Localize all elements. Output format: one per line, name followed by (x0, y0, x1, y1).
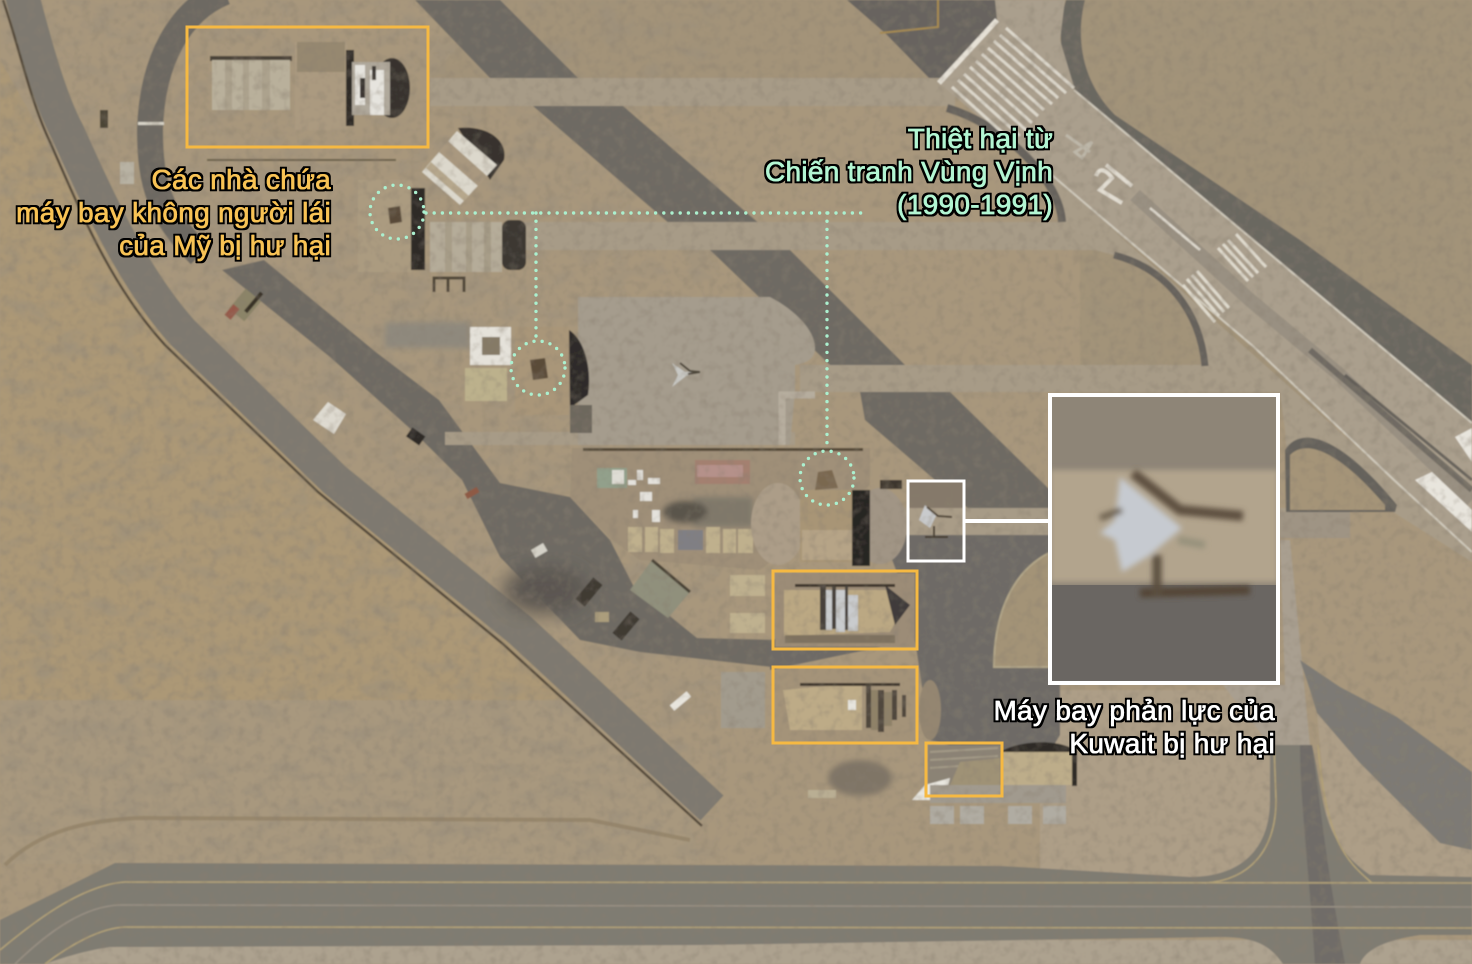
hangar 2 (502, 220, 526, 270)
label: Kuwaiti jet damaged: Máy bay phản lực của (993, 695, 1275, 726)
desert track (5, 818, 690, 865)
top-centre apron (847, 0, 997, 83)
runway markings (939, 20, 1472, 552)
callout box: drone hangars top (187, 27, 428, 147)
label: Kuwaiti jet damaged: Kuwait bị hư hại (1069, 728, 1275, 759)
oil staining (503, 566, 587, 614)
centre building (295, 42, 347, 130)
runway concrete (939, 0, 1472, 550)
building group: upper hangars (207, 42, 700, 433)
shoulder curves (947, 108, 1205, 366)
damaged building 2 (515, 327, 569, 415)
dotted leader lines: Gulf War damage (370, 185, 862, 505)
barrier (434, 278, 464, 292)
perimeter road (3, 0, 712, 826)
parked jet (672, 363, 700, 387)
leader: to damage 3 (825, 213, 829, 450)
concrete apron (578, 297, 815, 445)
base compound (570, 448, 907, 618)
touchdown stripes (1183, 234, 1266, 322)
compound ground (570, 448, 870, 570)
right damaged hangar (374, 58, 410, 118)
jet on apron (910, 482, 962, 538)
ground stain (385, 322, 470, 348)
white frame building (470, 327, 511, 365)
leader: to damage 2 (534, 213, 538, 340)
label: US drone hangars damaged: máy bay không người lái (16, 197, 331, 228)
label: Gulf War damage: Thiệt hại từ (908, 123, 1053, 154)
label: Kuwaiti jet damaged (993, 695, 1275, 759)
damaged building 1 (358, 180, 412, 272)
label: US drone hangars damaged (16, 164, 331, 261)
taxiway lines (0, 745, 1472, 964)
lower taxiway network (0, 745, 1472, 964)
jet highlight box (908, 481, 964, 561)
concrete fillets (1040, 165, 1472, 562)
concrete wedge (1223, 540, 1310, 745)
destroyed hangar C and annex (808, 742, 1078, 824)
grey slab (721, 672, 765, 728)
small vehicles and field structures (100, 110, 691, 711)
right desert island (1285, 438, 1397, 512)
diagonal hangar (458, 128, 505, 180)
label: Gulf War damage: (1990-1991) (897, 189, 1053, 220)
leader: horizontal (426, 211, 862, 215)
tan box (465, 368, 507, 401)
shaded strip (570, 405, 592, 433)
diagonal right road (1300, 660, 1472, 850)
label: Gulf War damage: Chiến tranh Vùng Vịnh (765, 156, 1053, 187)
runway shoulder (1061, 0, 1472, 430)
green court (630, 560, 690, 618)
callout box: hangar C (926, 743, 1002, 796)
fence (207, 159, 396, 161)
label: US drone hangars damaged: Các nhà chứa (151, 164, 331, 195)
skid marks (1135, 195, 1472, 500)
left hangar (210, 56, 292, 61)
destroyed hangar B (775, 669, 941, 741)
sand mottling (0, 0, 720, 860)
label: Gulf War damage (765, 123, 1053, 220)
diagonal main taxiway (415, 0, 1050, 510)
label: US drone hangars damaged: của Mỹ bị hư hại (119, 230, 331, 261)
dark apron (770, 528, 1060, 768)
inner ring taxiway upper (150, 0, 225, 255)
small side tents (730, 575, 765, 633)
circle: damage 2 (511, 341, 565, 395)
inner ring taxiway lower (222, 260, 780, 668)
scorch mark (828, 760, 892, 796)
runway number (1066, 135, 1132, 203)
inset: enlarged jet (1050, 395, 1278, 685)
tent row (628, 527, 753, 553)
concrete taxiways (430, 78, 1350, 538)
destroyed hangar A (775, 573, 915, 647)
callout box: hangar A (773, 571, 917, 649)
apron island (994, 553, 1049, 667)
circle: damage 3 (800, 451, 854, 505)
callout box: hangar B (773, 667, 917, 743)
circle: damage 1 (370, 185, 424, 239)
connector to inset (965, 519, 1050, 523)
debris (628, 470, 660, 522)
round buildings (751, 483, 805, 565)
